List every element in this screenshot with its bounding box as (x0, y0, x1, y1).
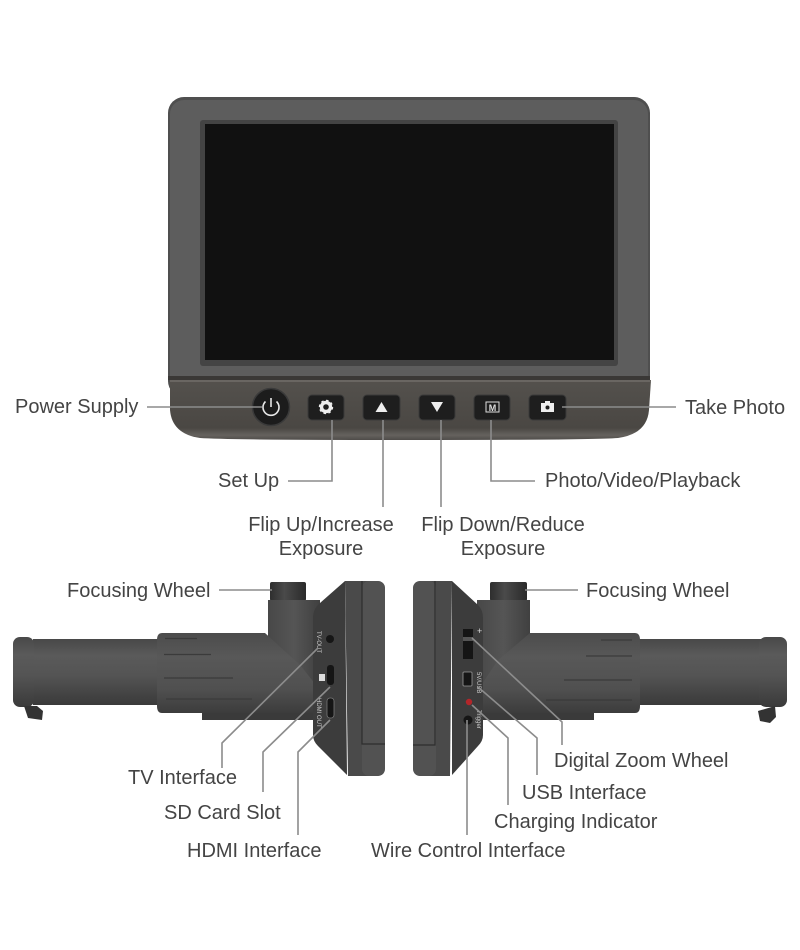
button: mode: M (489, 403, 496, 413)
label: set up: Set Up (218, 470, 279, 492)
label: flip down: Flip Down/Reduce (421, 514, 585, 536)
angled panel: TV-OUT (315, 631, 321, 653)
angled panel: + (477, 626, 482, 636)
angled panel (313, 581, 347, 775)
button: camera (529, 395, 566, 420)
monitor upper housing (168, 97, 650, 397)
label: focusing wheel right: Focusing Wheel (586, 580, 729, 602)
label: focusing wheel left: Focusing Wheel (67, 580, 210, 602)
body side (413, 581, 452, 776)
focusing wheel (490, 582, 527, 601)
focusing wheel (270, 582, 306, 601)
label: hdmi interface: HDMI Interface (187, 840, 321, 862)
label: digital zoom wheel: Digital Zoom Wheel (554, 750, 729, 772)
power button (252, 388, 290, 426)
button: flip up (363, 395, 400, 420)
label: wire control interface: Wire Control Interface (371, 840, 566, 862)
column (268, 600, 320, 700)
right side view of scope (413, 581, 787, 776)
grip (157, 633, 320, 720)
tube (33, 639, 159, 705)
label: sd card slot: SD Card Slot (164, 802, 281, 824)
monitor front view (168, 97, 651, 440)
screen (205, 124, 614, 360)
body side (345, 581, 385, 776)
angled panel: Trigger (475, 710, 481, 729)
angled panel (452, 581, 483, 775)
monitor button bar (170, 380, 651, 440)
label: flip up: Exposure (279, 538, 363, 560)
angled panel: HDMI OUT (315, 698, 321, 728)
label: take photo: Take Photo (685, 397, 785, 419)
button: mode (474, 395, 510, 420)
label: charging indicator: Charging Indicator (494, 811, 658, 833)
tube (638, 639, 762, 705)
left side view of scope (13, 581, 385, 776)
column (477, 600, 530, 700)
button: set up (308, 395, 344, 420)
leader lines (147, 407, 676, 835)
label: usb interface: USB Interface (522, 782, 647, 804)
eye cup (13, 637, 43, 720)
label: flip down: Exposure (461, 538, 545, 560)
label: tv interface: TV Interface (128, 767, 237, 789)
button: flip down (419, 395, 455, 420)
grip (478, 633, 640, 720)
label: power supply: Power Supply (15, 396, 138, 418)
eye cup (758, 637, 787, 723)
angled panel: 5V/USB (475, 672, 481, 693)
label: photo video playback: Photo/Video/Playback (545, 470, 741, 492)
label: flip up: Flip Up/Increase (248, 514, 394, 536)
